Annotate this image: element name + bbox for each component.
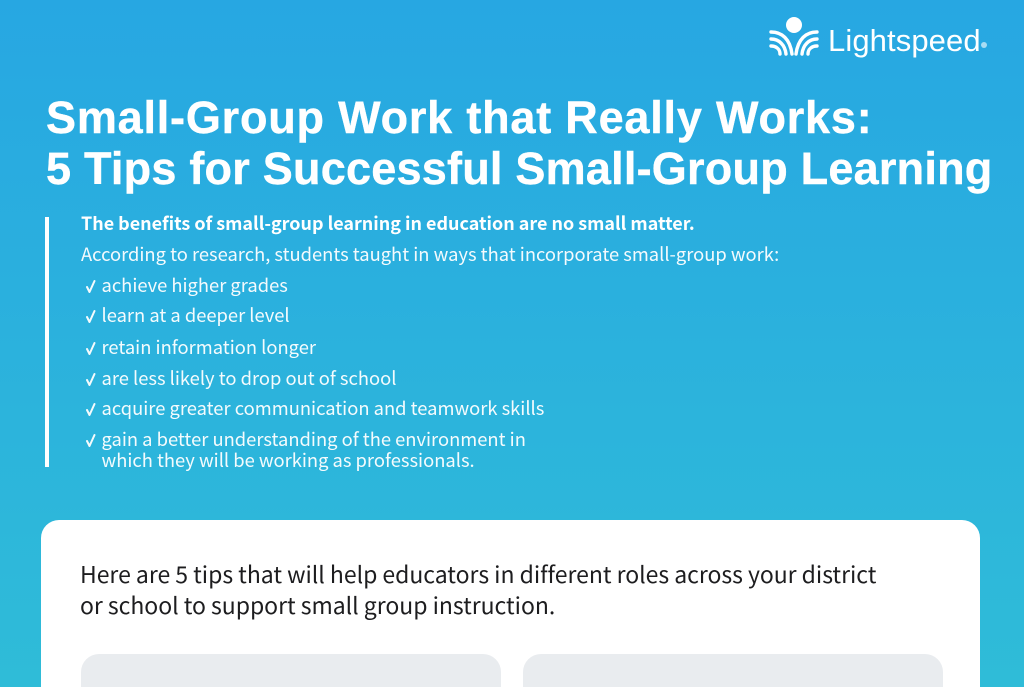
- card intro text: or school to support small group instruction.: [80, 586, 555, 620]
- checklist item 2: learn at a deeper level: [102, 302, 290, 328]
- logo: Lightspeed: [769, 17, 987, 58]
- intro heading: The benefits of small-group learning in education are no small matter.: [81, 210, 695, 236]
- title line 2: 5 Tips for Successful Small-Group Learning: [46, 143, 993, 194]
- icon: Lightspeed mark: [769, 17, 819, 56]
- intro block: [81, 210, 779, 473]
- panel: tip card right: [523, 654, 943, 687]
- checklist item 1: achieve higher grades: [102, 272, 288, 298]
- checklist item 6: gain a better understanding of the environment in: [102, 426, 526, 452]
- panel: tip card left: [81, 654, 501, 687]
- panel: tips card: [41, 520, 980, 687]
- card intro text: [80, 556, 876, 620]
- title: [46, 92, 993, 194]
- checklist item 5: acquire greater communication and teamwork skills: [102, 395, 544, 421]
- card intro text: Here are 5 tips that will help educators in different roles across your district: [80, 556, 876, 590]
- checklist item 6: which they will be working as professionals.: [102, 447, 475, 473]
- intro sentence: According to research, students taught in ways that incorporate small-group work:: [81, 241, 779, 267]
- title line 1: Small-Group Work that Really Works:: [46, 92, 872, 143]
- accent bar: [45, 217, 49, 467]
- checklist item 6: [86, 426, 526, 473]
- registered mark: [981, 42, 987, 48]
- checklist item 3: retain information longer: [102, 334, 316, 360]
- wordmark: Lightspeed: [828, 23, 981, 58]
- checklist item 4: are less likely to drop out of school: [102, 365, 396, 391]
